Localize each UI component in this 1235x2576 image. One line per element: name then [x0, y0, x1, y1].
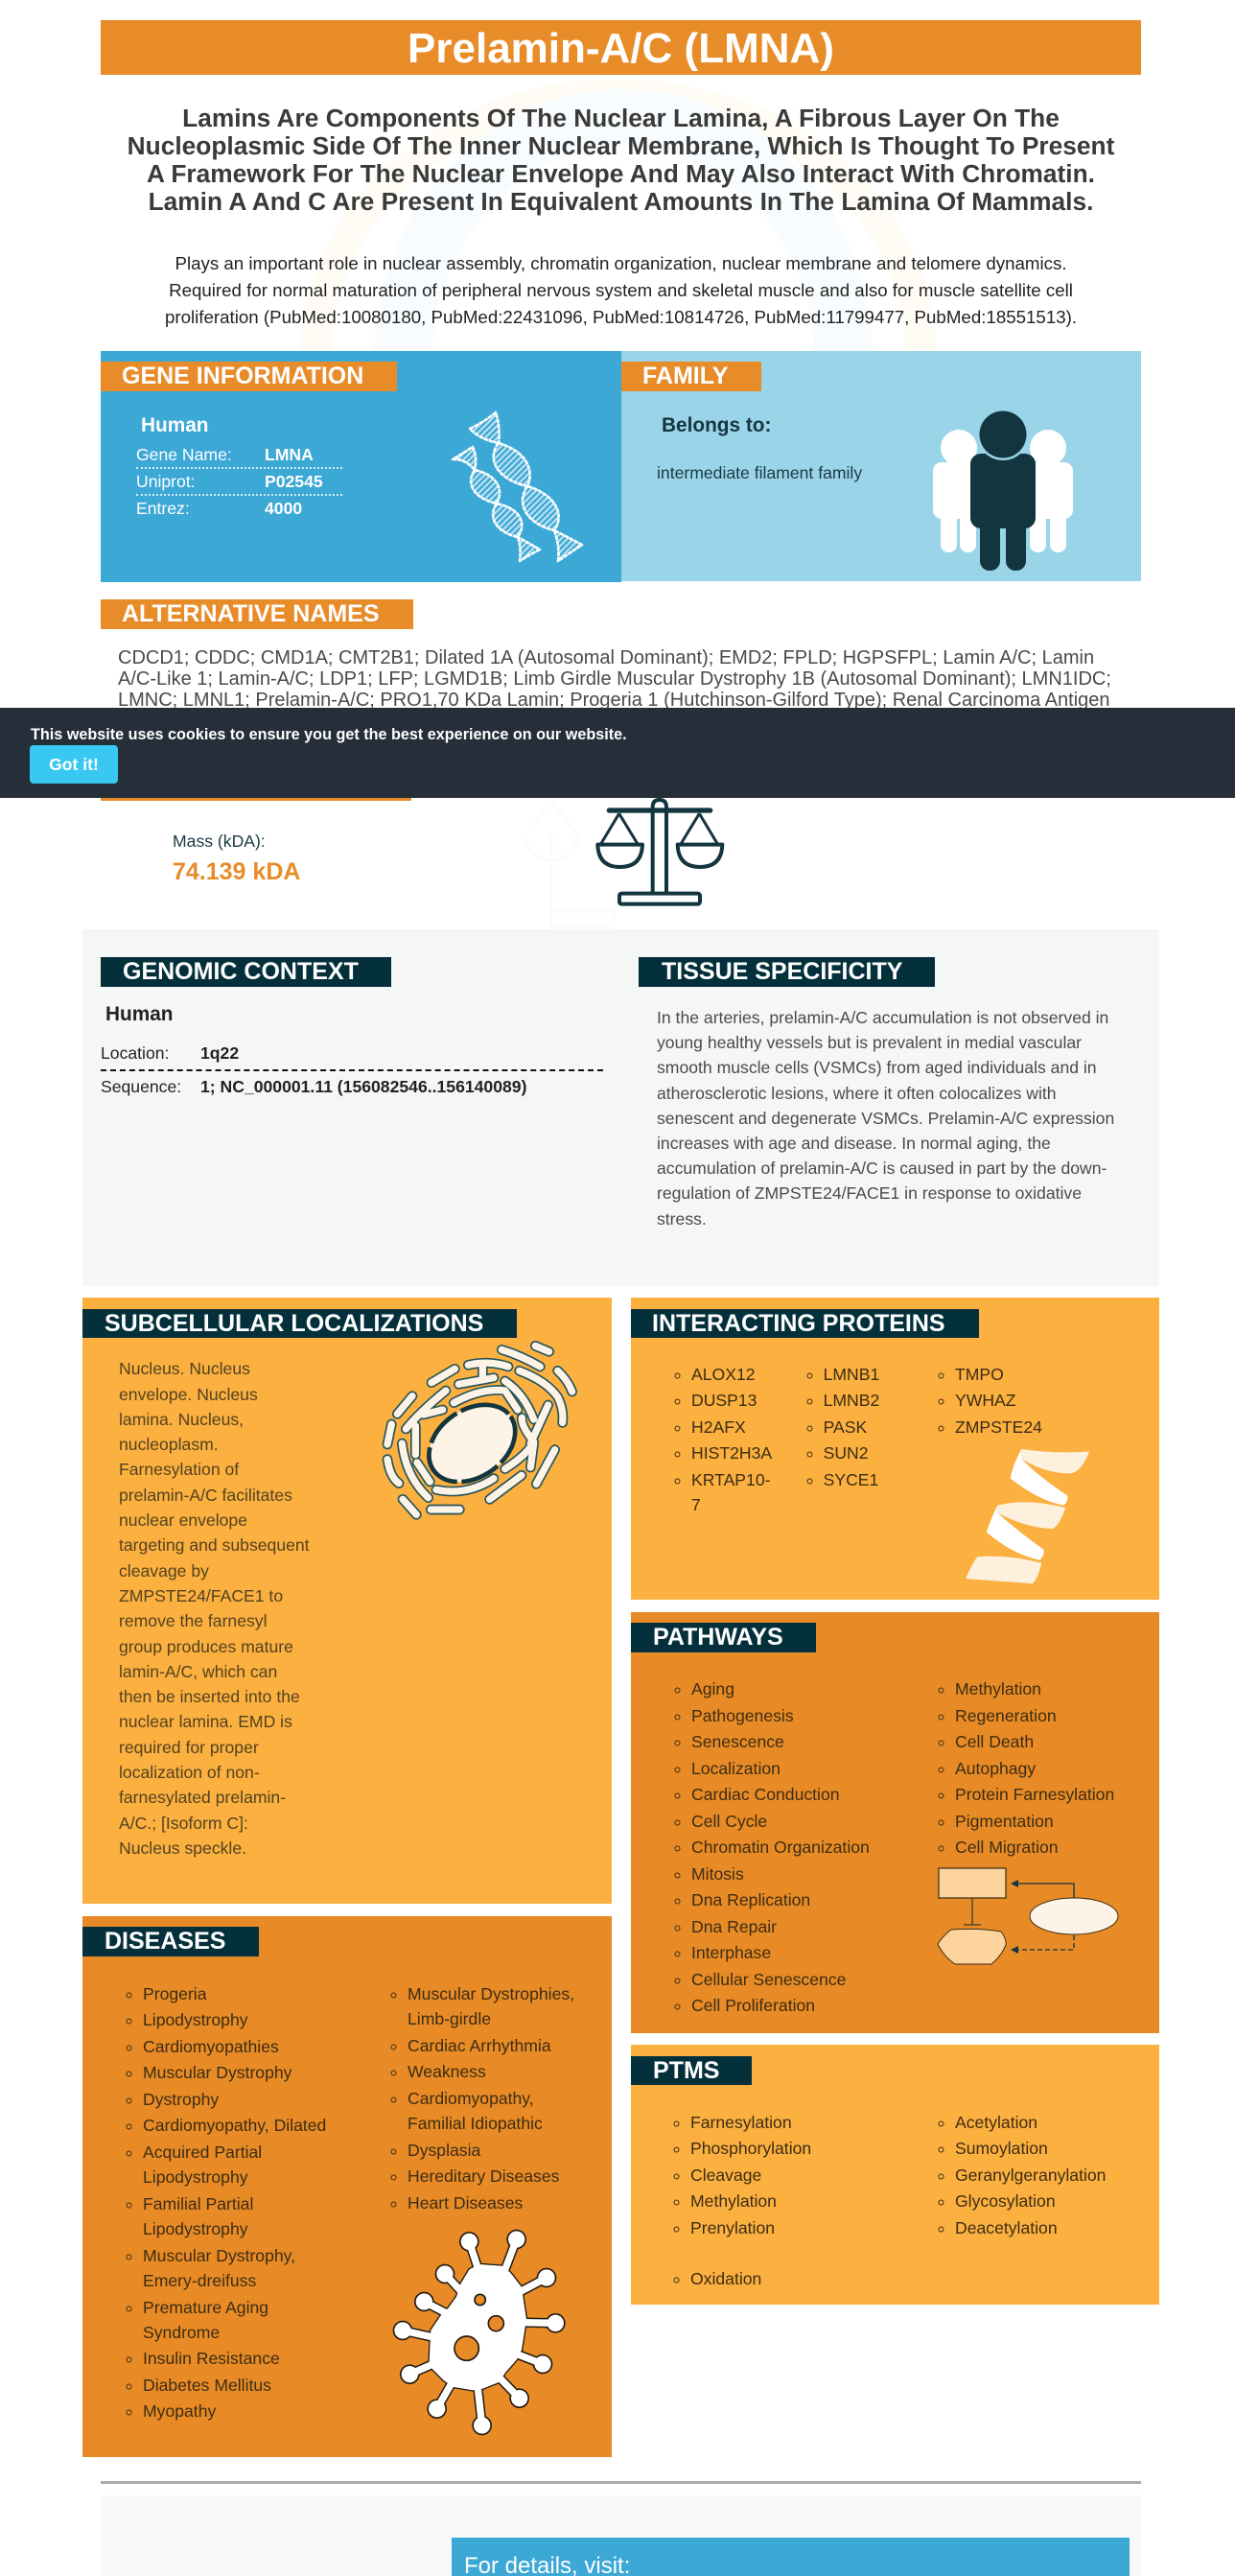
panel: footer — [101, 2495, 1141, 2576]
list: proteins column 2: PASK — [824, 1417, 867, 1437]
uniprot row: Uniprot: — [136, 472, 196, 491]
list: diseases column 1: Syndrome — [143, 2323, 220, 2342]
label: belongs to: Belongs to: — [662, 414, 771, 436]
uniprot row — [136, 472, 323, 491]
panel: genomic context and tissue specificity: 1; NC_000001.11 (156082546..156140089) — [200, 1077, 526, 1096]
list: pathways column 1: Aging — [691, 1679, 734, 1698]
panel: genomic context and tissue specificity: 1q22 — [200, 1043, 239, 1063]
list: proteins column 1: DUSP13 — [691, 1391, 757, 1410]
entrez row: Entrez: — [136, 499, 190, 518]
text block: function description: proliferation (PubMed:10080180, PubMed:22431096, PubMed:10814726, PubMed:11799477, PubMed:18551513). — [165, 307, 1077, 327]
list: diseases column 2: Dysplasia — [408, 2141, 480, 2160]
diagram: pathway schematic — [938, 1867, 1118, 1964]
list: pathways column 1: Cell Proliferation — [691, 1996, 815, 2015]
list: diseases column 2: Weakness — [408, 2062, 486, 2081]
list: diseases column 1: Insulin Resistance — [143, 2349, 280, 2368]
icon: virus — [393, 2229, 566, 2436]
panel: genomic context and tissue specificity — [82, 929, 1159, 1286]
list: diseases column 1: Dystrophy — [143, 2090, 219, 2109]
list: proteins column 1: ALOX12 — [691, 1365, 756, 1384]
list: proteins column 3: ZMPSTE24 — [955, 1417, 1042, 1437]
panel: gene information: LMNA — [265, 445, 314, 464]
label: species: Human — [105, 1003, 173, 1025]
list: diseases column 1: Muscular Dystrophy — [143, 2063, 291, 2082]
text block: localization: targeting and subsequent — [119, 1535, 310, 1555]
list: proteins column 2: SUN2 — [824, 1443, 869, 1463]
icon: protein helix — [966, 1448, 1089, 1584]
list: PTMs extra item: Oxidation — [690, 2269, 761, 2288]
text block: tissue specificity — [657, 1008, 1114, 1229]
list: proteins column 1: KRTAP10- — [691, 1470, 770, 1489]
heading strip: mass section — [101, 767, 411, 801]
heading: diseases: DISEASES — [105, 1928, 225, 1955]
icon: faint scale watermark — [513, 796, 676, 930]
text block: localization: localization of non- — [119, 1763, 260, 1782]
entrez row — [136, 499, 302, 518]
list: diseases column 2: Limb-girdle — [408, 2009, 491, 2028]
list: diseases column 2: Cardiomyopathy, — [408, 2089, 534, 2108]
list: diseases column 1: Lipodystrophy — [143, 2219, 248, 2238]
list: pathways column 1: Dna Repair — [691, 1917, 777, 1936]
list: diseases column 1: Myopathy — [143, 2401, 216, 2421]
heading: summary: A Framework For The Nuclear Envelope And May Also Interact With Chromatin. — [147, 159, 1095, 188]
list: pathways column 1 — [675, 1679, 870, 2015]
text block: tissue specificity: smooth muscle cells (VSMCs) from aged individuals and in — [657, 1058, 1097, 1077]
text block: tissue specificity: atherosclerotic lesions, where it often colocalizes with — [657, 1084, 1057, 1103]
heading: family: FAMILY — [642, 363, 728, 389]
text block: alternative names: LMNC; LMNL1; Prelamin-A/C; PRO1,70 KDa Lamin; Progeria 1 (Hutchinson-Gilford Type); Renal Carcinoma Antigen — [118, 690, 1110, 711]
list: PTMs column 2: Deacetylation — [955, 2218, 1058, 2237]
heading: family — [621, 362, 761, 391]
text block: tissue specificity: increases with age and disease. In normal aging, the — [657, 1134, 1051, 1153]
location row: Location: — [101, 1043, 169, 1063]
cookie message: This website uses cookies to ensure you get the best experience on our website. — [31, 726, 627, 743]
heading: summary: Lamins Are Components Of The Nuclear Lamina, A Fibrous Layer On The — [182, 104, 1060, 132]
list: pathways column 1: Cell Cycle — [691, 1812, 767, 1831]
text block: localization: cleavage by — [119, 1561, 209, 1581]
list: pathways column 1: Dna Replication — [691, 1890, 810, 1909]
list: PTMs column 1: Farnesylation — [690, 2113, 792, 2132]
list: PTMs column 1: Methylation — [690, 2191, 777, 2211]
list: diseases column 1: Familial Partial — [143, 2194, 253, 2213]
text block: localization: nucleoplasm. — [119, 1435, 219, 1454]
text block: localization: farnesylated prelamin- — [119, 1788, 286, 1807]
icon: DNA helix — [451, 410, 583, 562]
panel: family — [621, 351, 1141, 581]
text block: tissue specificity: accumulation of prelamin-A/C is caused in part by the down- — [657, 1159, 1107, 1178]
list: diseases column 1: Muscular Dystrophy, — [143, 2246, 295, 2265]
callout: details link — [452, 2538, 1130, 2576]
text block: function description: Plays an important role in nuclear assembly, chromatin organization, nuclear membrane and telomere dynamics. — [175, 253, 1067, 273]
family name: intermediate filament family — [657, 463, 862, 482]
list: pathways column 1: Cardiac Conduction — [691, 1785, 840, 1804]
list: pathways column 2: Cell Death — [955, 1732, 1034, 1751]
heading: subcellular localizations: SUBCELLULAR LOCALIZATIONS — [105, 1310, 483, 1337]
label: mass: Mass (kDA): — [173, 831, 266, 851]
list: proteins column 3: TMPO — [955, 1365, 1004, 1384]
text block: localization: Farnesylation of — [119, 1460, 239, 1479]
text block: localization — [119, 1359, 310, 1858]
heading: PTMs: PTMS — [653, 2057, 719, 2084]
list: pathways column 1: Cellular Senescence — [691, 1970, 846, 1989]
list: pathways column 1: Senescence — [691, 1732, 784, 1751]
heading: PTMs — [631, 2056, 752, 2085]
text block: tissue specificity: senescent and degenerate VSMCs. Prelamin-A/C expression — [657, 1109, 1114, 1128]
text block: function description: Required for normal maturation of peripheral nervous system and skeletal muscle and also for muscle satellite cell — [169, 280, 1073, 300]
list: diseases column 1: Premature Aging — [143, 2298, 268, 2317]
list: PTMs column 2: Sumoylation — [955, 2139, 1048, 2158]
panel: subcellular localizations — [82, 1298, 612, 1904]
list: pathways column 2: Cell Migration — [955, 1838, 1059, 1857]
list: pathways column 2: Pigmentation — [955, 1812, 1054, 1831]
heading: interacting proteins: INTERACTING PROTEINS — [652, 1310, 945, 1337]
list: proteins column 2: LMNB2 — [824, 1391, 879, 1410]
panel: gene information: P02545 — [265, 472, 323, 491]
list: proteins column 2: LMNB1 — [824, 1365, 879, 1384]
location row — [101, 1043, 239, 1063]
list: diseases column 1: Acquired Partial — [143, 2143, 262, 2162]
heading: summary: Lamin A And C Are Present In Equivalent Amounts In The Lamina Of Mammals. — [149, 186, 1093, 215]
gene name row: Gene Name: — [136, 445, 232, 464]
text block: localization: prelamin-A/C facilitates — [119, 1486, 292, 1505]
text block: localization: Nucleus. Nucleus — [119, 1359, 250, 1378]
icon: people group — [933, 410, 1073, 571]
list: proteins column 1: H2AFX — [691, 1417, 746, 1437]
list: PTMs column 1 — [673, 2113, 811, 2237]
list: pathways column 2 — [938, 1679, 1114, 1857]
list: PTMs column 2 — [938, 2113, 1106, 2237]
heading: diseases — [82, 1927, 259, 1956]
list: diseases column 2: Cardiac Arrhythmia — [408, 2036, 551, 2055]
list: proteins column 3: YWHAZ — [955, 1391, 1016, 1410]
text block: localization: Nucleus speckle. — [119, 1838, 246, 1858]
text block: alternative names: CDCD1; CDDC; CMD1A; CMT2B1; Dilated 1A (Autosomal Dominant); EMD2; FPLD; HGPSFPL; Lamin A/C; Lamin — [118, 647, 1094, 668]
button: got it: Got it! — [49, 755, 99, 774]
heading: tissue specificity: TISSUE SPECIFICITY — [662, 958, 902, 985]
sequence row — [101, 1077, 526, 1096]
list: diseases column 2: Familial Idiopathic — [408, 2114, 543, 2133]
text block: localization: group produces mature — [119, 1637, 293, 1656]
text block: localization: envelope. Nucleus — [119, 1385, 258, 1404]
panel: pathways — [631, 1612, 1159, 2033]
list: pathways column 2: Regeneration — [955, 1706, 1057, 1725]
list: proteins column 1: 7 — [691, 1495, 701, 1514]
text block: localization: remove the farnesyl — [119, 1611, 268, 1630]
list: proteins column 1 — [675, 1365, 772, 1514]
heading: summary: Nucleoplasmic Side Of The Inner Nuclear Membrane, Which Is Thought To Present — [128, 130, 1114, 159]
list: PTMs column 1: Cleavage — [690, 2166, 761, 2185]
panel: PTMs — [631, 2045, 1159, 2305]
label: species: Human — [141, 414, 208, 436]
panel: interacting proteins — [631, 1298, 1159, 1600]
gene name row — [136, 445, 314, 464]
cookie banner — [0, 708, 1235, 798]
list: pathways column 2: Autophagy — [955, 1759, 1036, 1778]
text block: localization: lamin-A/C, which can — [119, 1662, 277, 1681]
list: diseases column 1: Lipodystrophy — [143, 2010, 248, 2029]
list: diseases column 1: Cardiomyopathy, Dilated — [143, 2116, 326, 2135]
heading: genomic context: GENOMIC CONTEXT — [123, 958, 359, 985]
text block: tissue specificity: regulation of ZMPSTE24/FACE1 in response to oxidative — [657, 1183, 1082, 1203]
heading: pathways: PATHWAYS — [653, 1624, 783, 1651]
list: diseases column 1: Diabetes Mellitus — [143, 2376, 271, 2395]
panel: gene information: 4000 — [265, 499, 302, 518]
list: diseases column 1: Emery-dreifuss — [143, 2271, 256, 2290]
title: Prelamin-A/C (LMNA) — [408, 25, 834, 72]
text block: localization: A/C.; [Isoform C]: — [119, 1814, 248, 1833]
text block: localization: nuclear envelope — [119, 1510, 247, 1530]
list: diseases column 1: Cardiomyopathies — [143, 2037, 279, 2056]
list: pathways column 1: Pathogenesis — [691, 1706, 794, 1725]
panel: diseases — [82, 1916, 612, 2457]
sequence row: Sequence: — [101, 1077, 181, 1096]
list: pathways column 1: Interphase — [691, 1943, 771, 1962]
list: diseases column 1 — [127, 1984, 326, 2421]
icon: nucleus and endoplasmic reticulum — [382, 1341, 577, 1520]
text block: alternative names — [118, 647, 1111, 711]
button: got it — [30, 745, 118, 784]
list: PTMs column 1: Prenylation — [690, 2218, 775, 2237]
icon: balance scale — [595, 798, 725, 906]
list: diseases column 2: Heart Diseases — [408, 2193, 523, 2213]
text block: tissue specificity: In the arteries, prelamin-A/C accumulation is not observed in — [657, 1008, 1108, 1027]
text block: function description — [165, 253, 1077, 327]
text block: localization: required for proper — [119, 1738, 259, 1757]
text block: tissue specificity: young healthy vessels but is prevalent in medial vascular — [657, 1033, 1082, 1052]
list: PTMs column 2: Glycosylation — [955, 2191, 1056, 2211]
list: diseases column 2: Muscular Dystrophies, — [408, 1984, 574, 2003]
list: diseases column 1: Progeria — [143, 1984, 207, 2003]
heading: pathways — [631, 1623, 816, 1652]
list: pathways column 1: Chromatin Organization — [691, 1838, 870, 1857]
list: proteins column 1: HIST2H3A — [691, 1443, 772, 1463]
list: PTMs column 2: Geranylgeranylation — [955, 2166, 1106, 2185]
list: pathways column 1: Localization — [691, 1759, 781, 1778]
text block: localization: nuclear lamina. EMD is — [119, 1712, 292, 1731]
list: PTMs column 1: Phosphorylation — [690, 2139, 811, 2158]
list: pathways column 2: Protein Farnesylation — [955, 1785, 1114, 1804]
text block: localization: then be inserted into the — [119, 1687, 300, 1706]
background watermark — [301, 79, 936, 351]
text block: localization: lamina. Nucleus, — [119, 1410, 244, 1429]
list: diseases column 2 — [391, 1984, 574, 2213]
list: proteins column 2 — [807, 1365, 879, 1489]
list: PTMs column 2: Acetylation — [955, 2113, 1037, 2132]
list: diseases column 2: Hereditary Diseases — [408, 2166, 559, 2186]
list: pathways column 1: Mitosis — [691, 1864, 744, 1884]
heading: gene information: GENE INFORMATION — [122, 363, 363, 389]
text block: localization: ZMPSTE24/FACE1 to — [119, 1586, 283, 1605]
value: mass: 74.139 kDA — [173, 858, 300, 885]
list: proteins column 2: SYCE1 — [824, 1470, 878, 1489]
heading: summary — [128, 104, 1114, 215]
text block: alternative names: A/C-Like 1; Lamin-A/C; LDP1; LFP; LGMD1B; Limb Girdle Muscular Dystrophy 1B (Autosomal Dominant); LMN1IDC; — [118, 668, 1111, 690]
list: pathways column 2: Methylation — [955, 1679, 1041, 1698]
list: diseases column 1: Lipodystrophy — [143, 2167, 248, 2187]
list: proteins column 3 — [938, 1365, 1042, 1437]
text block: tissue specificity: stress. — [657, 1209, 707, 1229]
title — [101, 20, 1141, 75]
heading: alternative names: ALTERNATIVE NAMES — [122, 600, 380, 627]
panel: gene information — [101, 351, 621, 582]
